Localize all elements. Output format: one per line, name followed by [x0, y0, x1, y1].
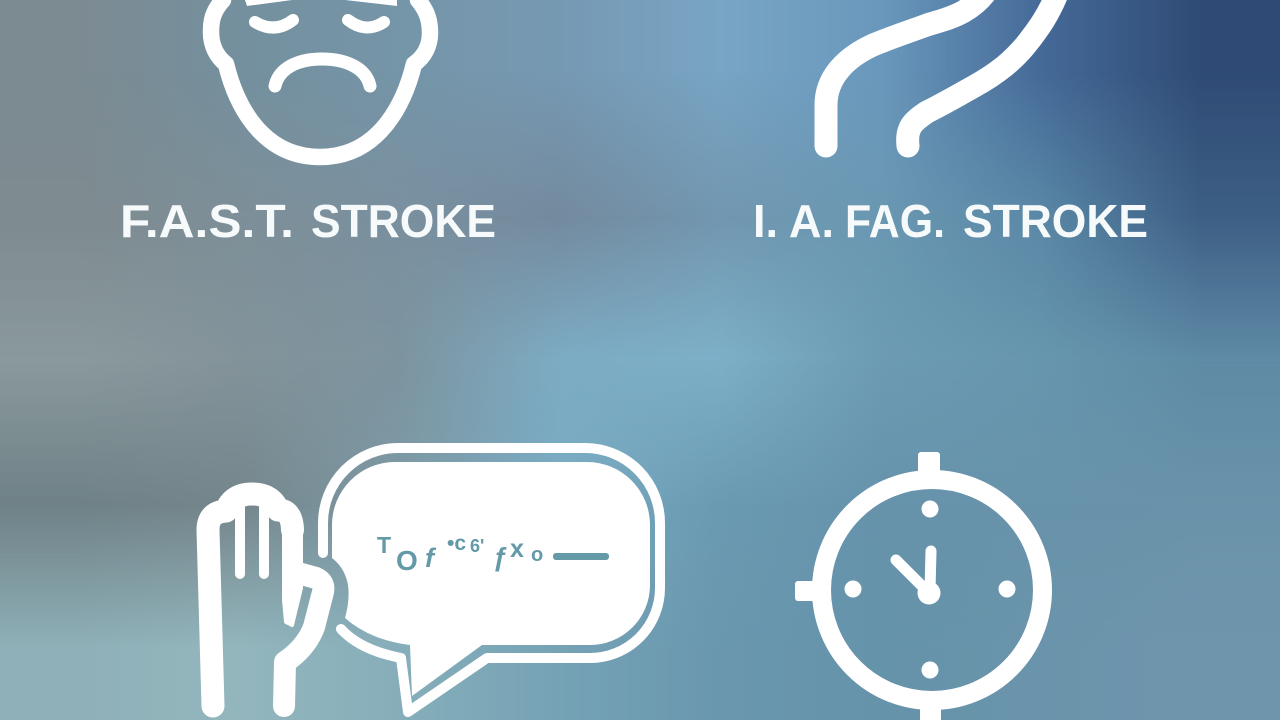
- heading: F.A.S.T. STROKE: F.A.S.T.: [120, 195, 294, 247]
- bubble outer ring: [323, 448, 660, 712]
- bubble garbled text: x: [510, 535, 524, 563]
- icon: clock: [795, 452, 1042, 720]
- bubble garbled text: o: [531, 544, 543, 566]
- frowning mouth: [275, 59, 370, 86]
- icon: raised hand: [208, 494, 323, 706]
- thumb: [284, 573, 323, 706]
- heading: I. A. FAG. STROKE: FAG.: [845, 195, 945, 247]
- icon: speech bubble: [323, 448, 660, 712]
- bubble garbled text: •c: [447, 532, 466, 555]
- bubble garbled text: [377, 532, 609, 576]
- bubble garbled text: f: [425, 543, 437, 573]
- clock ring: [822, 480, 1042, 700]
- hand outline: [208, 494, 292, 706]
- left closed eye: [255, 20, 293, 28]
- bubble garbled text: ƒ: [493, 542, 508, 572]
- clock hands: [896, 551, 931, 592]
- hour dots: [844, 500, 1016, 678]
- heading: F.A.S.T. STROKE: [120, 195, 496, 247]
- face outline with ears: [211, 0, 430, 157]
- bubble garbled text: T: [377, 532, 391, 558]
- heading: I. A. FAG. STROKE: I. A.: [753, 195, 834, 247]
- clock hub: [918, 582, 940, 604]
- finger dividers: [240, 505, 264, 574]
- icon: sad face: [211, 0, 430, 157]
- bubble filled body: [332, 462, 650, 696]
- top knob: [918, 452, 940, 474]
- bubble garbled text: 6': [470, 536, 484, 556]
- right eyebrow: [345, 0, 397, 6]
- left knob: [795, 581, 817, 601]
- right closed eye: [348, 20, 384, 28]
- heading: I. A. FAG. STROKE: [753, 195, 1148, 247]
- heading: F.A.S.T. STROKE: STROKE: [311, 195, 496, 247]
- icon: flowing ribbon lines: [826, 0, 1060, 146]
- palm edge: [284, 522, 301, 625]
- bottom knob: [920, 704, 941, 720]
- bubble garbled text: O: [396, 545, 418, 576]
- heading: I. A. FAG. STROKE: STROKE: [963, 195, 1148, 247]
- left eyebrow: [245, 0, 292, 6]
